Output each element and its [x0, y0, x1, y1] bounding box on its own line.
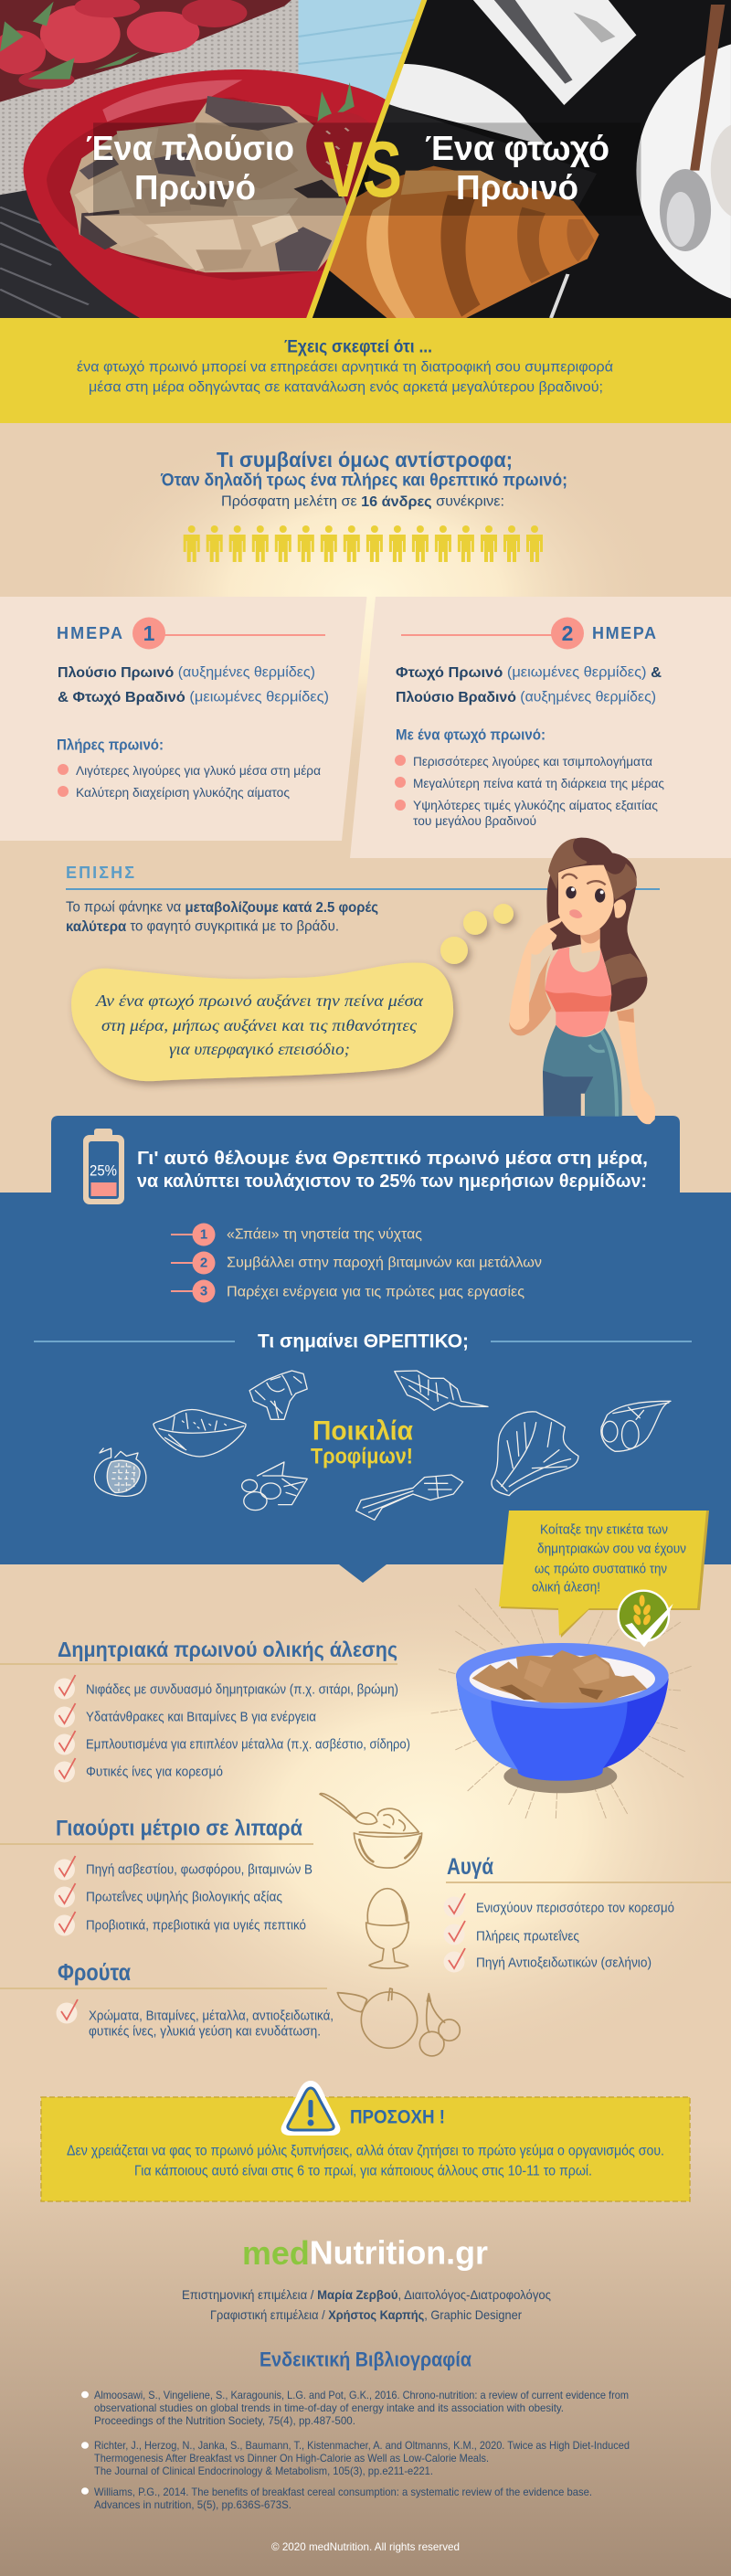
hero titles: Πρωινό [134, 169, 256, 207]
sketch: egg in cup [366, 1889, 408, 1968]
references: Thermogenesis After Breakfast vs Dinner On High-Calorie as Well as Low-Calorie Meals. [94, 2452, 489, 2465]
credits: Επιστημονική επιμέλεια / Μαρία Ζερβού, Διαιτολόγος-Διατροφολόγος [182, 2287, 551, 2302]
panel: day 2: Με ένα φτωχό πρωινό: [396, 726, 546, 744]
copyright: © 2020 medNutrition. All rights reserved [271, 2540, 460, 2553]
thought bubble: Αν ένα φτωχό πρωινό αυξάνει την πείνα μέσα [95, 991, 424, 1010]
section: cereals: Φυτικές ίνες για κορεσμό [86, 1764, 223, 1780]
panel: day 2: Περισσότερες λιγούρες και τσιμπολογήματα [413, 754, 652, 769]
references: observational studies on global trends in time-of-day of energy intake and its association with obesity. [94, 2401, 564, 2414]
sketch: asparagus [356, 1475, 463, 1520]
list: benefits: 2 [200, 1256, 207, 1270]
callout: attention [41, 2081, 690, 2201]
credits: Γραφιστική επιμέλεια / Χρήστος Καρπής, Graphic Designer [210, 2307, 522, 2322]
section: cereals [0, 1638, 410, 1782]
panel: day 1: 1 [143, 621, 155, 645]
logo: medNutrition.gr [242, 2233, 488, 2272]
hero titles: Πρωινό [456, 169, 578, 207]
panel: also section: καλύτερα το φαγητό συγκριτικά με το βράδυ. [66, 919, 339, 934]
panel: day 1: Πλούσιο Πρωινό (αυξημένες θερμίδες) [58, 665, 315, 680]
section: cereals: Νιφάδες με συνδυασμό δημητριακών (π.χ. σιτάρι, βρώμη) [86, 1681, 398, 1698]
panel: nutritious breakfast: να καλύπτει τουλάχιστον το 25% των ημερήσιων θερμίδων: [137, 1171, 647, 1192]
panel: also section [66, 864, 660, 934]
section: eggs: Ενισχύουν περισσότερο τον κορεσμό [476, 1901, 674, 1915]
callout: attention: Για κάποιους αυτό είναι στις 6 το πρωί, για κάποιους άλλους στις 10-11 το πρωί. [134, 2164, 592, 2178]
section: yogurt [0, 1817, 313, 1935]
callout: check the label: ως πρώτο συστατικό την [535, 1561, 667, 1577]
icon: warning triangle [281, 2081, 340, 2136]
panel: day 1: Λιγότερες λιγούρες για γλυκό μέσα στη μέρα [76, 763, 321, 778]
panel: day 2: ΗΜΕΡΑ [592, 624, 656, 642]
panel: also section: ΕΠΙΣΗΣ [66, 864, 134, 882]
panel: day 2 [350, 597, 731, 858]
section: cereals: Δημητριακά πρωινού ολικής άλεσης [58, 1638, 397, 1661]
section: cereals: Υδατάνθρακες και Βιταμίνες Β για ενέργεια [86, 1709, 316, 1725]
callout: attention: Δεν χρειάζεται να φας το πρωινό μόλις ξυπνήσεις, αλλά όταν ζητήσει το πρώτο γεύμα ο οργανισμός σου. [67, 2144, 664, 2158]
panel: day 1 [0, 597, 367, 841]
VS badge: VS [323, 126, 402, 214]
section: yogurt: Πρωτεΐνες υψηλής βιολογικής αξίας [86, 1890, 282, 1904]
hero photo split [0, 0, 731, 318]
panel: nutritious breakfast: Τι σημαίνει ΘΡΕΠΤΙΚΟ; [258, 1330, 469, 1352]
section: fruit [0, 1958, 334, 2040]
callout: check the label [499, 1511, 709, 1638]
panel: day 2: Πλούσιο Βραδινό (αυξημένες θερμίδες) [396, 689, 656, 705]
diagonal divider [306, 0, 427, 318]
sketch: pomegranate [94, 1448, 146, 1496]
sketch: bowl of grains [154, 1409, 246, 1457]
panel: intro question: ένα φτωχό πρωινό μπορεί να επηρεάσει αρνητικά τη διατροφική σου συμπεριφορά [77, 360, 613, 375]
section: eggs: Πηγή Αντιοξειδωτικών (σελήνιο) [476, 1956, 652, 1970]
thought bubble: στη μέρα, μήπως αυξάνει και τις πιθανότητες [101, 1016, 418, 1034]
panel: nutritious breakfast: Γι' αυτό θέλουμε ένα Θρεπτικό πρωινό μέσα στη μέρα, [137, 1149, 648, 1169]
sketch: orange and cherries [337, 1988, 460, 2056]
heading: reverse question: Τι συμβαίνει όμως αντίστροφα; [217, 448, 513, 472]
section: eggs: Αυγά [447, 1854, 494, 1880]
section: eggs: Πλήρεις πρωτεΐνες [476, 1928, 579, 1945]
panel: day 2: του μεγάλου βραδινού [413, 813, 536, 828]
references: The Journal of Clinical Endocrinology & Metabolism, 105(3), pp.e211-e221. [94, 2465, 433, 2477]
section: cereals: Εμπλουτισμένα για επιπλέον μέταλλα (π.χ. ασβέστιο, σίδηρο) [86, 1736, 410, 1753]
heading: bibliography: Ενδεικτική Βιβλιογραφία [260, 2348, 471, 2370]
list: benefits: «Σπάει» τη νηστεία της νύχτας [227, 1226, 422, 1243]
panel: day 1: Πλήρες πρωινό: [57, 737, 164, 753]
credits [182, 2287, 551, 2322]
references: Almoosawi, S., Vingeliene, S., Karagounis, L.G. and Pot, G.K., 2016. Chrono-nutrition: a review of current evidence from [94, 2389, 629, 2401]
panel: day 2: 2 [562, 621, 573, 645]
icon: battery 25% [83, 1129, 124, 1204]
sketch: spinach [492, 1412, 578, 1496]
thought bubble [71, 904, 514, 1081]
hero titles [86, 130, 609, 207]
panel: day 1: ΗΜΕΡΑ [57, 624, 122, 642]
section: eggs [444, 1854, 731, 1972]
references: Richter, J., Herzog, N., Janka, S., Baumann, T., Kistenmacher, A. and Oltmanns, K.M., 2020. Twice as High Diet-Induced [94, 2439, 630, 2452]
panel: nutritious breakfast [0, 1116, 731, 1583]
list: benefits: 1 [200, 1226, 207, 1243]
heading: reverse question: Όταν δηλαδή τρως ένα πλήρες και θρεπτικό πρωινό; [160, 472, 567, 490]
list: benefits: 3 [200, 1283, 207, 1299]
hero titles: Ένα φτωχό [425, 130, 609, 168]
panel: intro question [0, 318, 731, 423]
panel: nutritious breakfast: Ποικιλία [313, 1416, 414, 1446]
section: yogurt: Προβιοτικά, πρεβιοτικά για υγιές πεπτικό [86, 1917, 306, 1934]
heading: reverse question: Πρόσφατη μελέτη σε 16 άνδρες συνέκρινε: [221, 493, 504, 510]
panel: also section: Το πρωί φάνηκε να μεταβολίζουμε κατά 2.5 φορές [66, 899, 378, 916]
panel: intro question: Έχεις σκεφτεί ότι ... [284, 338, 432, 356]
section: fruit: Φρούτα [58, 1958, 131, 1986]
panel: day 2: Φτωχό Πρωινό (μειωμένες θερμίδες) & [396, 665, 662, 680]
icon: battery 25%: 25% [90, 1162, 117, 1179]
thought bubble: για υπερφαγικό επεισόδιο; [169, 1040, 350, 1058]
section: yogurt: Πηγή ασβεστίου, φωσφόρου, βιταμινών Β [86, 1862, 313, 1877]
sketch: olives [601, 1401, 671, 1451]
list: benefits: Συμβάλλει στην παροχή βιταμινών και μετάλλων [227, 1256, 542, 1270]
section: yogurt: Γιαούρτι μέτριο σε λιπαρά [56, 1817, 302, 1840]
list: benefits: Παρέχει ενέργεια για τις πρώτες μας εργασίες [227, 1285, 524, 1299]
icon: whole grain badge [619, 1591, 673, 1648]
panel: day 2: Υψηλότερες τιμές γλυκόζης αίματος εξαιτίας [413, 798, 658, 812]
callout: check the label: Κοίταξε την ετικέτα των [540, 1522, 668, 1537]
sketch: yogurt bowl [320, 1794, 422, 1868]
food sketches [94, 1371, 671, 1520]
dark title band [93, 122, 641, 216]
photo: poor breakfast [303, 0, 731, 318]
background glow lower [91, 1581, 731, 2074]
tan sketches [320, 1794, 460, 2056]
panel: nutritious breakfast: Τροφίμων! [311, 1444, 413, 1469]
footer gradient [0, 2138, 731, 2576]
hero titles: Ένα πλούσιο [86, 130, 294, 168]
callout: check the label: ολική άλεση! [532, 1579, 600, 1595]
illustration: bowl of cereal [431, 1588, 692, 1818]
references: Advances in nutrition, 5(5), pp.636S-673S. [94, 2498, 291, 2511]
photo: rich breakfast [0, 0, 433, 318]
background glow upper [64, 411, 667, 777]
references: Williams, P.G., 2014. The benefits of breakfast cereal consumption: a systematic review of the evidence base. [94, 2486, 592, 2498]
heading: reverse question [160, 448, 567, 510]
references [81, 2389, 630, 2511]
sketch: berries with leaf [242, 1462, 307, 1511]
callout: attention: ΠΡΟΣΟΧΗ ! [350, 2107, 445, 2127]
panel: day 2: Μεγαλύτερη πείνα κατά τη διάρκεια της μέρας [413, 776, 664, 790]
references: Proceedings of the Nutrition Society, 75(4), pp.487-500. [94, 2414, 355, 2427]
section: fruit: Χρώματα, Βιταμίνες, μέταλλα, αντιοξειδωτικά, [89, 2009, 334, 2023]
icon row: sixteen men [184, 525, 543, 562]
section: fruit: φυτικές ίνες, γλυκιά γεύση και ενυδάτωση. [89, 2023, 321, 2040]
list: benefits [171, 1223, 542, 1303]
woman character [509, 838, 655, 1124]
callout: check the label: δημητριακών σου να έχουν [537, 1541, 686, 1557]
panel: day 1: Καλύτερη διαχείριση γλυκόζης αίματος [76, 785, 290, 800]
sketch: blueberries top [249, 1371, 307, 1419]
sketch: herb leaf [395, 1371, 488, 1410]
panel: intro question: μέσα στη μέρα οδηγώντας σε κατανάλωση ενός αρκετά μεγαλύτερου βραδινού; [89, 380, 603, 395]
panel: day 1: & Φτωχό Βραδινό (μειωμένες θερμίδες) [58, 689, 329, 705]
